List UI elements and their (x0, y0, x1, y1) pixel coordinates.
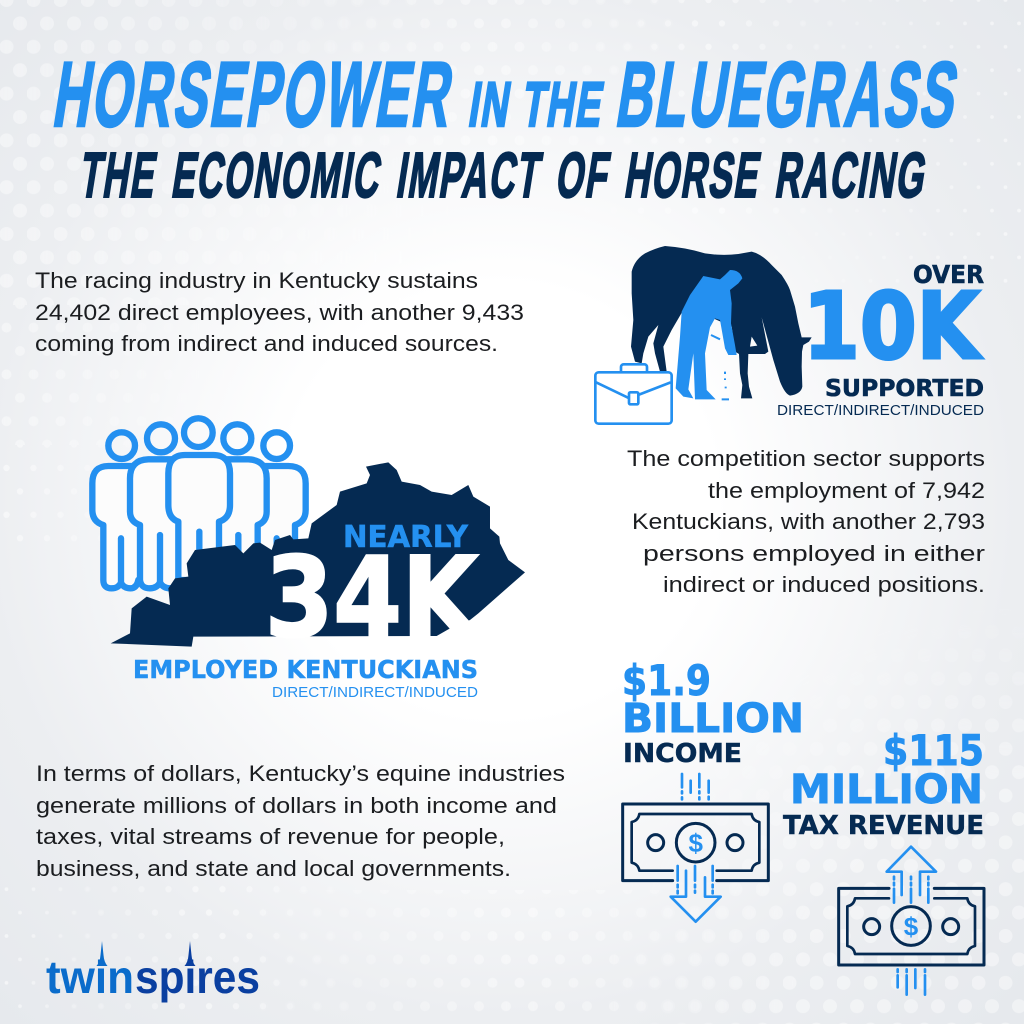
stat: over 10K supported: SUPPORTED (825, 374, 984, 402)
text block: dollars: taxes, vital streams of revenue for people, (36, 824, 505, 849)
logo: twinspires: spires (135, 951, 260, 1003)
text block: competition sector: The competition sector supports (627, 446, 985, 471)
stat: $1.9 billion income (622, 656, 804, 769)
text block: employees: The racing industry in Kentucky sustains (35, 268, 478, 293)
text block: dollars: generate millions of dollars in both income and (36, 793, 557, 818)
stat: over 10K supported (777, 260, 984, 419)
text block: dollars: business, and state and local governments. (36, 856, 511, 881)
icon: banknote with down arrow: $ (688, 828, 703, 858)
map: Kentucky state silhouette (111, 462, 525, 647)
logo: twinspires (46, 941, 260, 1003)
farrier hammer and sparks (711, 335, 729, 399)
stat: $115 million tax revenue (783, 726, 984, 841)
stat: over 10K supported: 10K (803, 273, 983, 380)
icon: banknote with up arrow (839, 847, 984, 995)
logo: twinspires: twin (46, 951, 134, 1003)
icon: briefcase (595, 364, 672, 424)
text block: competition sector: Kentuckians, with another 2,793 (632, 509, 985, 534)
stat: nearly 34K: 34K (265, 534, 482, 663)
text block: employees: coming from indirect and induced sources. (35, 331, 498, 356)
illustration: horse with farrier (631, 246, 812, 399)
label: employed Kentuckians (133, 655, 478, 701)
stat: $115 million tax revenue: MILLION (790, 767, 983, 813)
text block: dollars: In terms of dollars, Kentucky’s equine industries (36, 761, 565, 786)
farrier silhouette (676, 270, 742, 399)
stat: over 10K supported: DIRECT/INDIRECT/INDUCED (777, 402, 984, 419)
icon: banknote with up arrow: $ (904, 911, 919, 941)
stat: over 10K supported: OVER (913, 260, 984, 289)
text block: competition sector (627, 446, 986, 597)
text block: competition sector: persons employed in either (643, 541, 986, 566)
label: employed Kentuckians: EMPLOYED KENTUCKIANS (133, 655, 478, 684)
text block: competition sector: the employment of 7,942 (708, 478, 985, 503)
horse silhouette (631, 246, 812, 398)
text block: employees (35, 268, 524, 356)
icon: group of people (92, 418, 306, 588)
icon: banknote with down arrow (623, 774, 768, 922)
stat: $1.9 billion income: $1.9 (622, 656, 711, 705)
text block: competition sector: indirect or induced positions. (663, 572, 985, 597)
stat: $1.9 billion income: INCOME (623, 739, 742, 769)
title: HORSEPOWER (48, 43, 462, 146)
stat: $115 million tax revenue: $115 (883, 726, 984, 775)
stat: nearly 34K: NEARLY (343, 520, 469, 555)
text block: employees: 24,402 direct employees, with another 9,433 (35, 300, 524, 325)
text block: dollars (36, 761, 565, 881)
stat: $1.9 billion income: BILLION (622, 696, 804, 742)
title: IN THE (465, 70, 610, 140)
stat: $115 million tax revenue: TAX REVENUE (783, 811, 984, 841)
label: employed Kentuckians: DIRECT/INDIRECT/INDUCED (272, 684, 478, 701)
